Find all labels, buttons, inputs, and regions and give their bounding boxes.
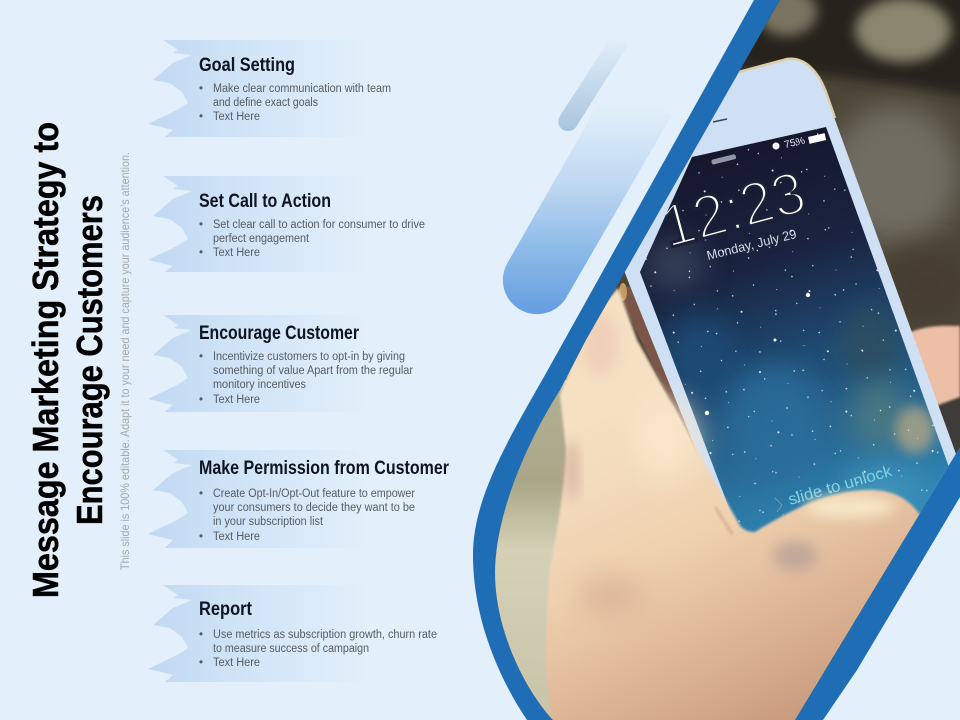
- panel: set call to action: •: [199, 247, 203, 259]
- blue frame: [473, 0, 960, 720]
- panel: encourage customer: Text Here: [213, 394, 260, 406]
- date: Monday, July 29: [705, 226, 798, 263]
- earpiece slot: [711, 154, 736, 165]
- panel: set call to action: •: [199, 219, 203, 231]
- status bar: [772, 133, 826, 151]
- subtitle: This slide is 100% editable. Adapt it to your need and capture your audience’s attention.: [118, 152, 132, 570]
- panel: make permission from customer: Text Here: [213, 531, 260, 543]
- decorative small pill: [558, 35, 628, 131]
- panel: encourage customer: •: [199, 351, 203, 363]
- panel: encourage customer: •: [199, 394, 203, 406]
- panel: set call to action: [148, 176, 425, 272]
- panel: report: to measure success of campaign: [213, 643, 369, 655]
- panel: make permission from customer: Create Opt-In/Opt-Out feature to empower: [213, 488, 415, 500]
- panel: set call to action: perfect engagement: [213, 233, 310, 245]
- panel: make permission from customer: [148, 450, 449, 548]
- panel: report: Report: [199, 598, 252, 620]
- panel: report: •: [199, 657, 203, 669]
- panel: goal setting: •: [199, 111, 203, 123]
- panel: goal setting: [148, 40, 391, 137]
- panel: goal setting: Make clear communication with team: [213, 83, 391, 95]
- chevron: [775, 498, 782, 512]
- panel: encourage customer: Encourage Customer: [199, 322, 359, 344]
- panel: encourage customer: something of value Apart from the regular: [213, 365, 413, 377]
- panel: set call to action: Set clear call to action for consumer to drive: [213, 219, 425, 231]
- panel: make permission from customer: in your subscription list: [213, 516, 324, 528]
- panel: report: [148, 585, 437, 682]
- phone edge: gold rim: [616, 283, 696, 452]
- clock: 12:23: [654, 158, 812, 261]
- decorative large pill: [503, 80, 672, 314]
- panel: encourage customer: [148, 315, 413, 412]
- title: Message Marketing Strategy to: [25, 122, 66, 598]
- phone rim highlight: [735, 59, 835, 118]
- title: Encourage Customers: [69, 195, 110, 525]
- panel: make permission from customer: your consumers to decide they want to be: [213, 502, 415, 514]
- panel: report: Use metrics as subscription growth, churn rate: [213, 629, 437, 641]
- phone body: [620, 60, 960, 540]
- panel: goal setting: •: [199, 83, 203, 95]
- photo background: [470, 0, 960, 720]
- right fingertip: [905, 326, 960, 408]
- panel: encourage customer: Incentivize customers to opt-in by giving: [213, 351, 405, 363]
- phone screen: [640, 127, 948, 540]
- slide to unlock: slide to unlock: [786, 463, 895, 509]
- phone earpiece: [713, 119, 727, 122]
- panel: goal setting: Text Here: [213, 111, 260, 123]
- panel: make permission from customer: •: [199, 531, 203, 543]
- hand: [545, 288, 925, 720]
- photo: hand holding phone: [470, 0, 960, 720]
- status bar: 75%: [783, 135, 806, 151]
- panel: goal setting: and define exact goals: [213, 97, 318, 109]
- title: [25, 122, 110, 598]
- panel: set call to action: Text Here: [213, 247, 260, 259]
- panel: report: Text Here: [213, 657, 260, 669]
- panel: report: •: [199, 629, 203, 641]
- panel: goal setting: Goal Setting: [199, 54, 295, 76]
- panel: make permission from customer: Make Permission from Customer: [199, 457, 449, 479]
- panel: make permission from customer: •: [199, 488, 203, 500]
- panel: encourage customer: monitory incentives: [213, 379, 306, 391]
- panel: set call to action: Set Call to Action: [199, 190, 331, 212]
